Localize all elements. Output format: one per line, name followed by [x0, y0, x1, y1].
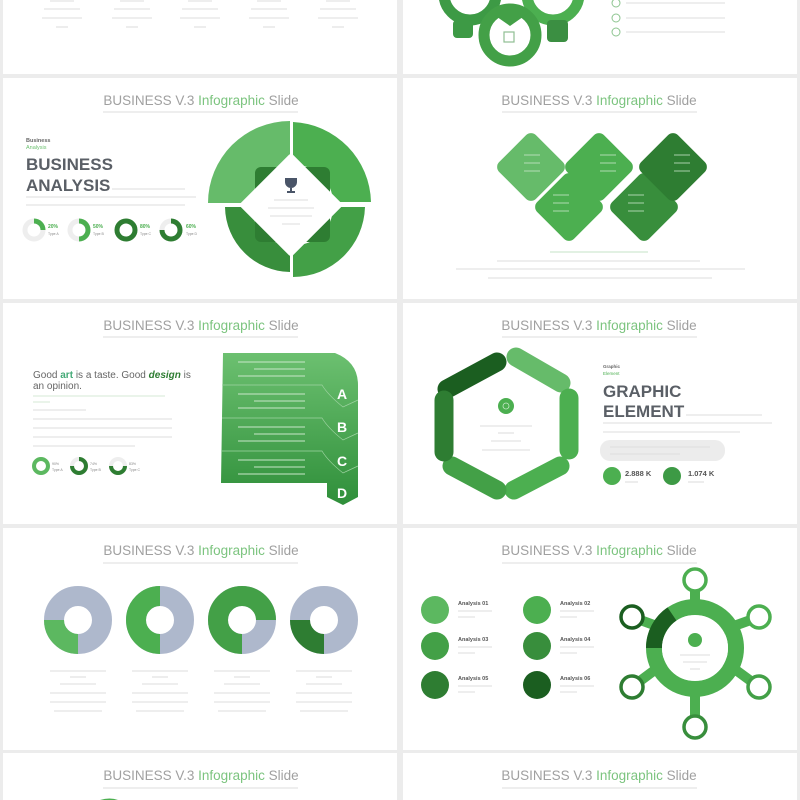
donuts: 83%: [129, 462, 136, 466]
heading text: [600, 364, 772, 461]
quadrant chart: [208, 121, 371, 277]
heading text: BUSINESS: [26, 155, 113, 174]
analysis list: Analysis 05: [458, 676, 488, 682]
banner ABCD: D: [337, 485, 347, 501]
network diagram: [621, 569, 770, 738]
donuts: 80%: [140, 224, 151, 230]
stats: 2.888 K: [625, 469, 652, 478]
analysis list: Analysis 01: [458, 601, 488, 607]
analysis list: Analysis 06: [560, 676, 590, 682]
donuts: 60%: [186, 224, 197, 230]
donuts: Type C: [140, 232, 152, 236]
donuts: 74%: [90, 462, 97, 466]
slide: bottom-right partial: BUSINESS V.3 Infographic Slide: [501, 768, 697, 783]
title: BUSINESS V.3 Infographic Slide: [501, 543, 697, 558]
donuts: [25, 221, 198, 239]
checklist: [612, 0, 725, 36]
heading text: ELEMENT: [603, 402, 685, 421]
donuts: 90%: [52, 462, 59, 466]
slide: analysis network: [403, 528, 797, 750]
heading text: Business: [26, 138, 50, 144]
slide: top-right partial: [403, 0, 797, 74]
banner ABCD: B: [337, 419, 347, 435]
donuts: Type A: [52, 468, 63, 472]
heading text: Element: [603, 371, 620, 376]
donuts: Type A: [48, 232, 59, 236]
slide: graphic element: [403, 303, 797, 524]
slide: good art banner: [3, 303, 397, 524]
analysis list: Analysis 04: [560, 637, 591, 643]
ring diagram: [444, 0, 579, 61]
heading text: Graphic: [603, 364, 621, 369]
donuts: [34, 459, 141, 473]
title: BUSINESS V.3 Infographic Slide: [103, 318, 299, 333]
slide: bottom-right partial: [403, 753, 797, 800]
title: BUSINESS V.3 Infographic Slide: [501, 93, 697, 108]
title: BUSINESS V.3 Infographic Slide: [103, 93, 299, 108]
stats: 1.074 K: [688, 469, 715, 478]
heading text: Analysis: [26, 145, 47, 151]
hexagon: [444, 357, 569, 490]
donuts: Type D: [186, 232, 198, 236]
slide: puzzle diamonds: [403, 78, 797, 299]
slide: four donuts: [3, 528, 397, 750]
donuts: Type B: [93, 232, 105, 236]
title: BUSINESS V.3 Infographic Slide: [103, 543, 299, 558]
donuts: Type B: [90, 468, 102, 472]
banner ABCD: [221, 353, 358, 505]
slide: bottom-left partial: BUSINESS V.3 Infographic Slide: [103, 768, 299, 783]
heading text: ANALYSIS: [26, 176, 110, 195]
quote: Good art is a taste. Good design is: [33, 370, 191, 381]
heading text: GRAPHIC: [603, 382, 681, 401]
diamonds: [494, 130, 710, 244]
donuts: Type C: [129, 468, 141, 472]
stats: [603, 467, 715, 485]
caption text: [456, 252, 745, 278]
icon: trophy: [285, 178, 297, 193]
quote: an opinion.: [33, 381, 82, 392]
heading text: [26, 138, 196, 205]
analysis list: [421, 596, 594, 699]
text columns: [42, 1, 358, 27]
analysis list: Analysis 03: [458, 637, 488, 643]
banner ABCD: A: [337, 386, 347, 402]
donut charts: [54, 596, 348, 644]
slide: top-left partial: [3, 0, 397, 74]
banner ABCD: C: [337, 453, 347, 469]
quote: [33, 370, 191, 446]
donuts: 20%: [48, 224, 59, 230]
donuts: 50%: [93, 224, 104, 230]
slide: business analysis: [3, 78, 397, 299]
title: BUSINESS V.3 Infographic Slide: [501, 318, 697, 333]
slide: bottom-left partial: [3, 753, 397, 800]
analysis list: Analysis 02: [560, 601, 590, 607]
captions: [50, 671, 352, 711]
